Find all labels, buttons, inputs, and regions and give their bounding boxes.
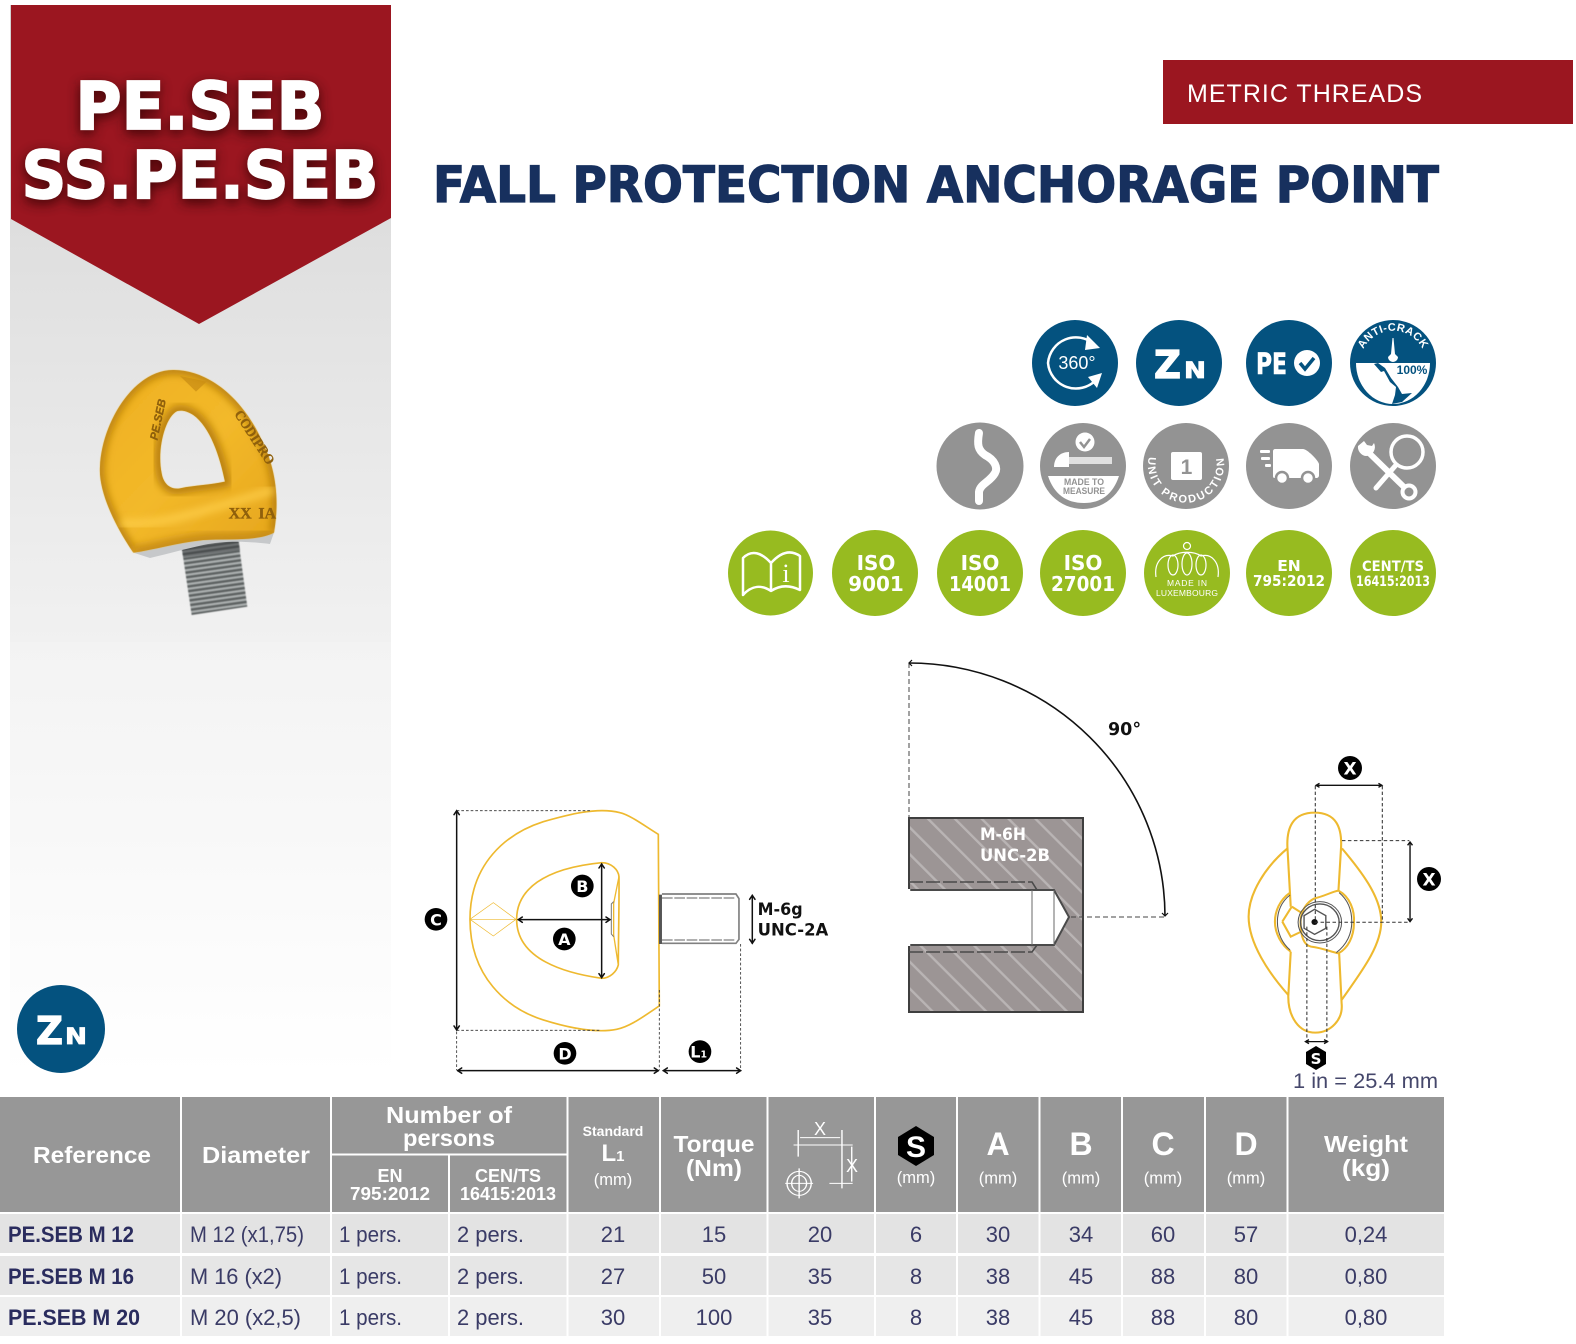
icon: CENT/TS 16415:2013: CENT/TS	[1362, 559, 1424, 575]
table row: PE.SEB M 16: 80	[1234, 1264, 1258, 1289]
icon: ISO 14001	[937, 530, 1023, 616]
table row: PE.SEB M 16: PE.SEB M 16	[8, 1264, 134, 1289]
table row: PE.SEB M 12: 60	[1151, 1222, 1175, 1247]
dimension badges: B	[576, 877, 588, 896]
badge: X right: X	[1422, 870, 1436, 890]
banner heading text	[21, 68, 379, 218]
table row: PE.SEB M 12: 15	[702, 1222, 726, 1247]
icon row: green certification badges	[728, 530, 1436, 616]
red label: metric threads	[1163, 60, 1573, 124]
table header: A	[986, 1126, 1010, 1162]
unit conversion note: 1 in = 25.4 mm	[1293, 1070, 1438, 1093]
table row: PE.SEB M 16: 45	[1069, 1264, 1093, 1289]
table header: (kg)	[1342, 1155, 1390, 1181]
table row: PE.SEB M 16: 1 pers.	[339, 1264, 402, 1289]
icon: ISO 14001: ISO	[961, 551, 999, 575]
table row: PE.SEB M 20: 1 pers.	[339, 1305, 402, 1330]
table row: PE.SEB M 16: 2 pers.	[457, 1264, 524, 1289]
table row: PE.SEB M 16: 0,80	[1345, 1264, 1387, 1289]
icon: EN 795:2012	[1246, 530, 1332, 616]
table header: L1	[601, 1140, 625, 1167]
header icon: X offset symbol: X	[846, 1156, 858, 1176]
icon: ISO 9001	[832, 530, 918, 616]
diagram: front dimension drawing	[425, 811, 828, 1073]
engraved marks on the bolt: XX	[229, 505, 252, 522]
header icon: S hexagon	[898, 1126, 934, 1166]
engraved marks on the bolt: IA	[258, 505, 277, 522]
thread spec label: M-6H	[980, 825, 1026, 845]
table header: (mm)	[594, 1171, 632, 1189]
hatched block	[909, 818, 1083, 1012]
icon: EN 795:2012: EN	[1277, 557, 1301, 575]
badge: S hexagon: S	[1311, 1050, 1321, 1068]
table row: PE.SEB M 12: 1 pers.	[339, 1222, 402, 1247]
table header: persons	[403, 1125, 495, 1151]
product photo: yellow swivel eye bolt	[100, 370, 277, 615]
table header: C	[1151, 1126, 1175, 1162]
table row: PE.SEB M 20: 8	[910, 1305, 922, 1330]
table row: PE.SEB M 12: 20	[808, 1222, 832, 1247]
icon: delivery truck	[1246, 423, 1332, 509]
table row: PE.SEB M 20: M 20 (x2,5)	[190, 1305, 301, 1330]
table header: 16415:2013	[460, 1184, 556, 1204]
icon: zinc: N	[1184, 359, 1206, 384]
icon: zinc badge bottom left	[17, 985, 105, 1073]
table row: PE.SEB M 12: 34	[1069, 1222, 1093, 1247]
icon: PE check: PE	[1256, 347, 1287, 381]
table row: PE.SEB M 16: 8	[910, 1264, 922, 1289]
table header: (mm)	[1227, 1170, 1265, 1188]
banner heading text: PE.SEB	[75, 72, 325, 149]
icon: ISO 9001: 9001	[848, 572, 904, 596]
icon: manual	[728, 530, 813, 616]
badge: X top: X	[1343, 760, 1357, 780]
engraved marks on the bolt	[149, 398, 277, 522]
icon: wrench and magnifier	[1350, 423, 1436, 509]
table row: PE.SEB M 20: 45	[1069, 1305, 1093, 1330]
table row: PE.SEB M 12: 57	[1234, 1222, 1258, 1247]
thread spec label: UNC-2B	[980, 846, 1050, 866]
red label: metric threads: METRIC THREADS	[1187, 80, 1423, 108]
table row: PE.SEB M 20	[8, 1305, 1387, 1330]
red banner with product names	[11, 5, 391, 324]
icon: unit production: 1	[1181, 456, 1193, 479]
panel: left product column background	[10, 5, 391, 1075]
rotation arc	[909, 660, 1168, 917]
dimension lines	[1307, 786, 1409, 1041]
table header: Number of	[386, 1102, 512, 1128]
table header: (mm)	[1144, 1170, 1182, 1188]
icon: made in Luxembourg: MADE IN	[1167, 578, 1207, 588]
icon: anti-crack 100%: 100%	[1397, 363, 1428, 377]
icon: unit production	[1143, 423, 1229, 509]
engraved marks on the bolt: CODIPRO	[231, 408, 277, 468]
table row: PE.SEB M 12: 2 pers.	[457, 1222, 524, 1247]
thread spec label: UNC-2A	[758, 921, 828, 940]
icon: made in Luxembourg: LUXEMBOURG	[1156, 588, 1218, 598]
banner heading text: SS.PE.SEB	[22, 137, 378, 214]
table header: (mm)	[1062, 1170, 1100, 1188]
badge: X top	[1338, 756, 1362, 780]
dimension badges: L1	[690, 1043, 707, 1062]
icon: ISO 27001: 27001	[1051, 572, 1115, 596]
icon: ISO 27001: ISO	[1064, 551, 1102, 575]
icon: CENT/TS 16415:2013: 16415:2013	[1356, 574, 1430, 590]
icon: zinc badge bottom left: Z	[36, 1009, 63, 1053]
badge: X right	[1417, 867, 1441, 891]
table row: PE.SEB M 20: 88	[1151, 1305, 1175, 1330]
icon: zinc: Z	[1154, 343, 1181, 387]
dimension badges: C	[430, 910, 442, 929]
icon: ISO 9001: ISO	[857, 551, 895, 575]
icon: made to measure	[1040, 423, 1126, 509]
header icon: X offset symbol: X	[814, 1119, 826, 1139]
table header: CEN/TS	[475, 1166, 541, 1186]
header icon: S hexagon: S	[906, 1131, 926, 1164]
icon: made to measure: MADE TO	[1064, 477, 1104, 488]
yellow eye outline	[470, 811, 659, 1031]
table header: Weight	[1324, 1131, 1408, 1157]
icon: zinc	[1136, 320, 1222, 406]
angle label: 90°	[1108, 720, 1141, 740]
badge: S hexagon	[1306, 1046, 1326, 1070]
table header: Standard	[583, 1123, 643, 1139]
table row: PE.SEB M 20: 80	[1234, 1305, 1258, 1330]
icon: manual: i	[782, 559, 790, 588]
table row: PE.SEB M 16: 27	[601, 1264, 625, 1289]
icon: 360 degree rotation	[1032, 320, 1118, 406]
icon: anti-crack 100%: ANTI-CRACK	[1358, 323, 1429, 349]
threaded hole	[909, 882, 1069, 952]
table header: D	[1234, 1126, 1258, 1162]
table row: PE.SEB M 16: 50	[702, 1264, 726, 1289]
table header	[0, 1097, 1444, 1212]
table row: PE.SEB M 12	[8, 1222, 1387, 1247]
table header: EN	[377, 1166, 403, 1186]
yellow outline	[1249, 813, 1381, 1033]
threaded stud	[659, 894, 739, 944]
icon: zinc badge bottom left: N	[65, 1025, 87, 1050]
table header: (mm)	[897, 1169, 935, 1187]
table row: PE.SEB M 20: PE.SEB M 20	[8, 1305, 140, 1330]
table row: PE.SEB M 16: M 16 (x2)	[190, 1264, 282, 1289]
icon: CENT/TS 16415:2013	[1350, 530, 1436, 616]
table row: PE.SEB M 12: 21	[601, 1222, 625, 1247]
table row: PE.SEB M 20: 2 pers.	[457, 1305, 524, 1330]
icon: anti-crack 100%	[1350, 320, 1436, 406]
table header: B	[1069, 1126, 1093, 1162]
icon: ISO 27001	[1040, 530, 1126, 616]
icon: PE check	[1246, 320, 1332, 406]
table row backgrounds	[0, 1212, 1444, 1336]
hex socket	[1277, 893, 1352, 953]
table header: (Nm)	[686, 1155, 742, 1181]
table row: PE.SEB M 20: 0,80	[1345, 1305, 1387, 1330]
table header: 795:2012	[350, 1184, 430, 1204]
table row: PE.SEB M 16: 35	[808, 1264, 832, 1289]
table row: PE.SEB M 12: M 12 (x1,75)	[190, 1222, 304, 1247]
engraved marks on the bolt: PE.SEB	[149, 398, 169, 441]
table row: PE.SEB M 16: 88	[1151, 1264, 1175, 1289]
dimension lines	[457, 811, 741, 1070]
table header: Reference	[33, 1142, 151, 1168]
icon: made in Luxembourg	[1144, 530, 1230, 616]
table header: Torque	[674, 1131, 754, 1157]
icon: ISO 14001: 14001	[949, 572, 1011, 596]
dimension badges: A	[558, 930, 571, 949]
icon: unit production: UNIT PRODUCTION	[1148, 458, 1224, 503]
dimension badges	[425, 875, 711, 1065]
table row: PE.SEB M 16	[8, 1264, 1387, 1289]
table row: PE.SEB M 12: 6	[910, 1222, 922, 1247]
diagram: tapped hole section with 90 degree arc	[909, 660, 1168, 1012]
icon: 360 degree rotation: 360°	[1058, 353, 1096, 373]
icon row: grey service badges	[936, 422, 1436, 510]
table: specifications	[0, 1097, 1444, 1336]
table row: PE.SEB M 20: 38	[986, 1305, 1010, 1330]
thread spec label: M-6g	[758, 900, 803, 919]
table row: PE.SEB M 20: 35	[808, 1305, 832, 1330]
table header: (mm)	[979, 1170, 1017, 1188]
banner heading text: SS.PE.SEB	[21, 141, 379, 218]
banner heading text: PE.SEB	[76, 68, 324, 145]
table row: PE.SEB M 16: 38	[986, 1264, 1010, 1289]
icon row: blue feature badges	[1032, 320, 1436, 406]
diagram: end view with X and S dimensions	[1249, 756, 1441, 1070]
title: FALL PROTECTION ANCHORAGE POINT	[433, 156, 1439, 214]
icon: made to measure: MEASURE	[1063, 486, 1105, 497]
header icon: X offset symbol	[785, 1119, 858, 1198]
table row: PE.SEB M 12: 30	[986, 1222, 1010, 1247]
table header: Diameter	[202, 1142, 310, 1168]
table row: PE.SEB M 20: 30	[601, 1305, 625, 1330]
icon: EN 795:2012: 795:2012	[1253, 572, 1325, 590]
icon: bent shape	[936, 422, 1024, 510]
bolt shading	[100, 370, 277, 553]
dimension badges: D	[558, 1044, 572, 1063]
table row: PE.SEB M 12: PE.SEB M 12	[8, 1222, 134, 1247]
table row: PE.SEB M 20: 100	[696, 1305, 732, 1330]
table row: PE.SEB M 12: 0,24	[1345, 1222, 1387, 1247]
